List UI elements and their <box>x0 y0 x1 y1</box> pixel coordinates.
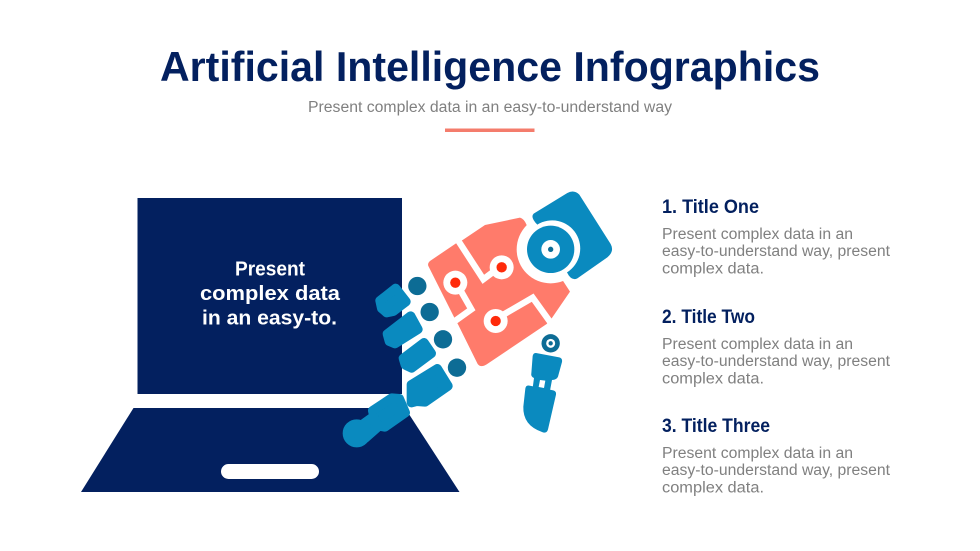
laptop illustration <box>81 198 460 492</box>
item 2 heading: 2. Title Two <box>662 307 755 328</box>
robot hand illustration <box>347 192 612 443</box>
item 3 body: Present complex data in an <box>662 445 853 462</box>
item 2 body <box>662 336 891 388</box>
accent rule <box>445 128 534 132</box>
laptop screen <box>138 198 402 394</box>
robot fingers <box>347 288 448 443</box>
title: Artificial Intelligence Infographics <box>160 43 820 90</box>
screen text: in an easy-to. <box>202 306 337 330</box>
robot thumb <box>523 353 562 433</box>
screen text <box>200 258 341 330</box>
robot wrist block <box>532 192 612 279</box>
screen text: complex data <box>200 282 341 305</box>
item 3 <box>662 416 891 496</box>
item 1 body <box>662 226 891 278</box>
thumb joint <box>541 334 560 352</box>
item 2 <box>662 307 891 388</box>
finger joints <box>408 277 466 377</box>
item 1 <box>662 197 891 278</box>
item 2 body: easy-to-understand way, present <box>662 353 891 370</box>
item 1 body: easy-to-understand way, present <box>662 243 891 260</box>
laptop base <box>81 408 460 492</box>
item 2 body: Present complex data in an <box>662 336 853 353</box>
item 1 body: Present complex data in an <box>662 226 853 243</box>
screen text: Present <box>235 258 305 280</box>
circuit traces <box>453 239 551 323</box>
item 3 body <box>662 445 891 496</box>
laptop trackpad <box>221 464 319 479</box>
subtitle: Present complex data in an easy-to-understand way <box>308 99 672 116</box>
item 3 body: easy-to-understand way, present <box>662 462 891 479</box>
white cutout around joint <box>517 215 585 283</box>
item 3 body: complex data. <box>662 480 764 496</box>
item 2 body: complex data. <box>662 370 764 388</box>
wrist joint <box>527 226 574 273</box>
circuit nodes <box>443 255 514 333</box>
item 3 heading: 3. Title Three <box>662 416 770 437</box>
robot palm <box>428 218 570 366</box>
item 1 body: complex data. <box>662 260 764 278</box>
item 1 heading: 1. Title One <box>662 197 759 218</box>
